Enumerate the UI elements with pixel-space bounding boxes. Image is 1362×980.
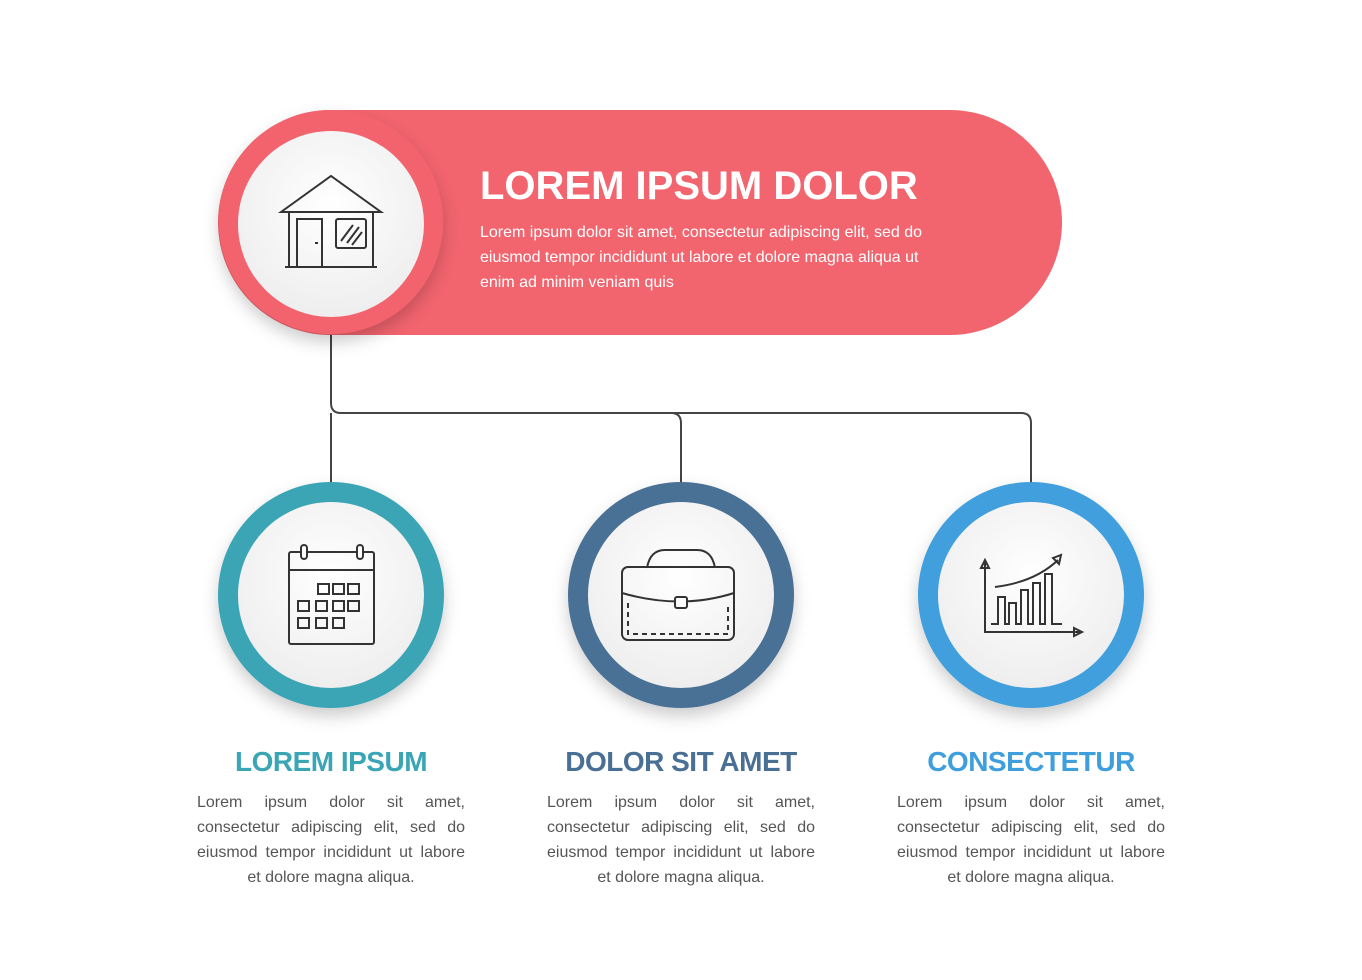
heading: dolor sit amet: DOLOR SIT AMET bbox=[565, 746, 797, 777]
header banner bbox=[218, 110, 1062, 335]
circle: briefcase bbox=[568, 482, 794, 708]
circle: growth chart bbox=[918, 482, 1144, 708]
heading: lorem ipsum: LOREM IPSUM bbox=[235, 746, 427, 777]
connector lines bbox=[331, 335, 1031, 482]
header text: Lorem ipsum dolor sit amet, consectetur adipiscing elit, sed do eiusmod tempor incididunt ut labore et dolore magna aliqua ut enim ad minim veniam quis bbox=[480, 224, 922, 291]
icon: house bbox=[281, 176, 381, 267]
text block 1: Lorem ipsum dolor sit amet, consectetur adipiscing elit, sed do eiusmod tempor incididunt ut labore et dolore magna aliqua. bbox=[197, 794, 465, 886]
text block 3: Lorem ipsum dolor sit amet, consectetur adipiscing elit, sed do eiusmod tempor incididunt ut labore et dolore magna aliqua. bbox=[897, 794, 1165, 886]
circle: calendar bbox=[218, 482, 444, 708]
text block 2: Lorem ipsum dolor sit amet, consectetur adipiscing elit, sed do eiusmod tempor incididunt ut labore et dolore magna aliqua. bbox=[547, 794, 815, 886]
heading: consectetur: CONSECTETUR bbox=[927, 746, 1135, 777]
header title: LOREM IPSUM DOLOR bbox=[480, 164, 918, 208]
